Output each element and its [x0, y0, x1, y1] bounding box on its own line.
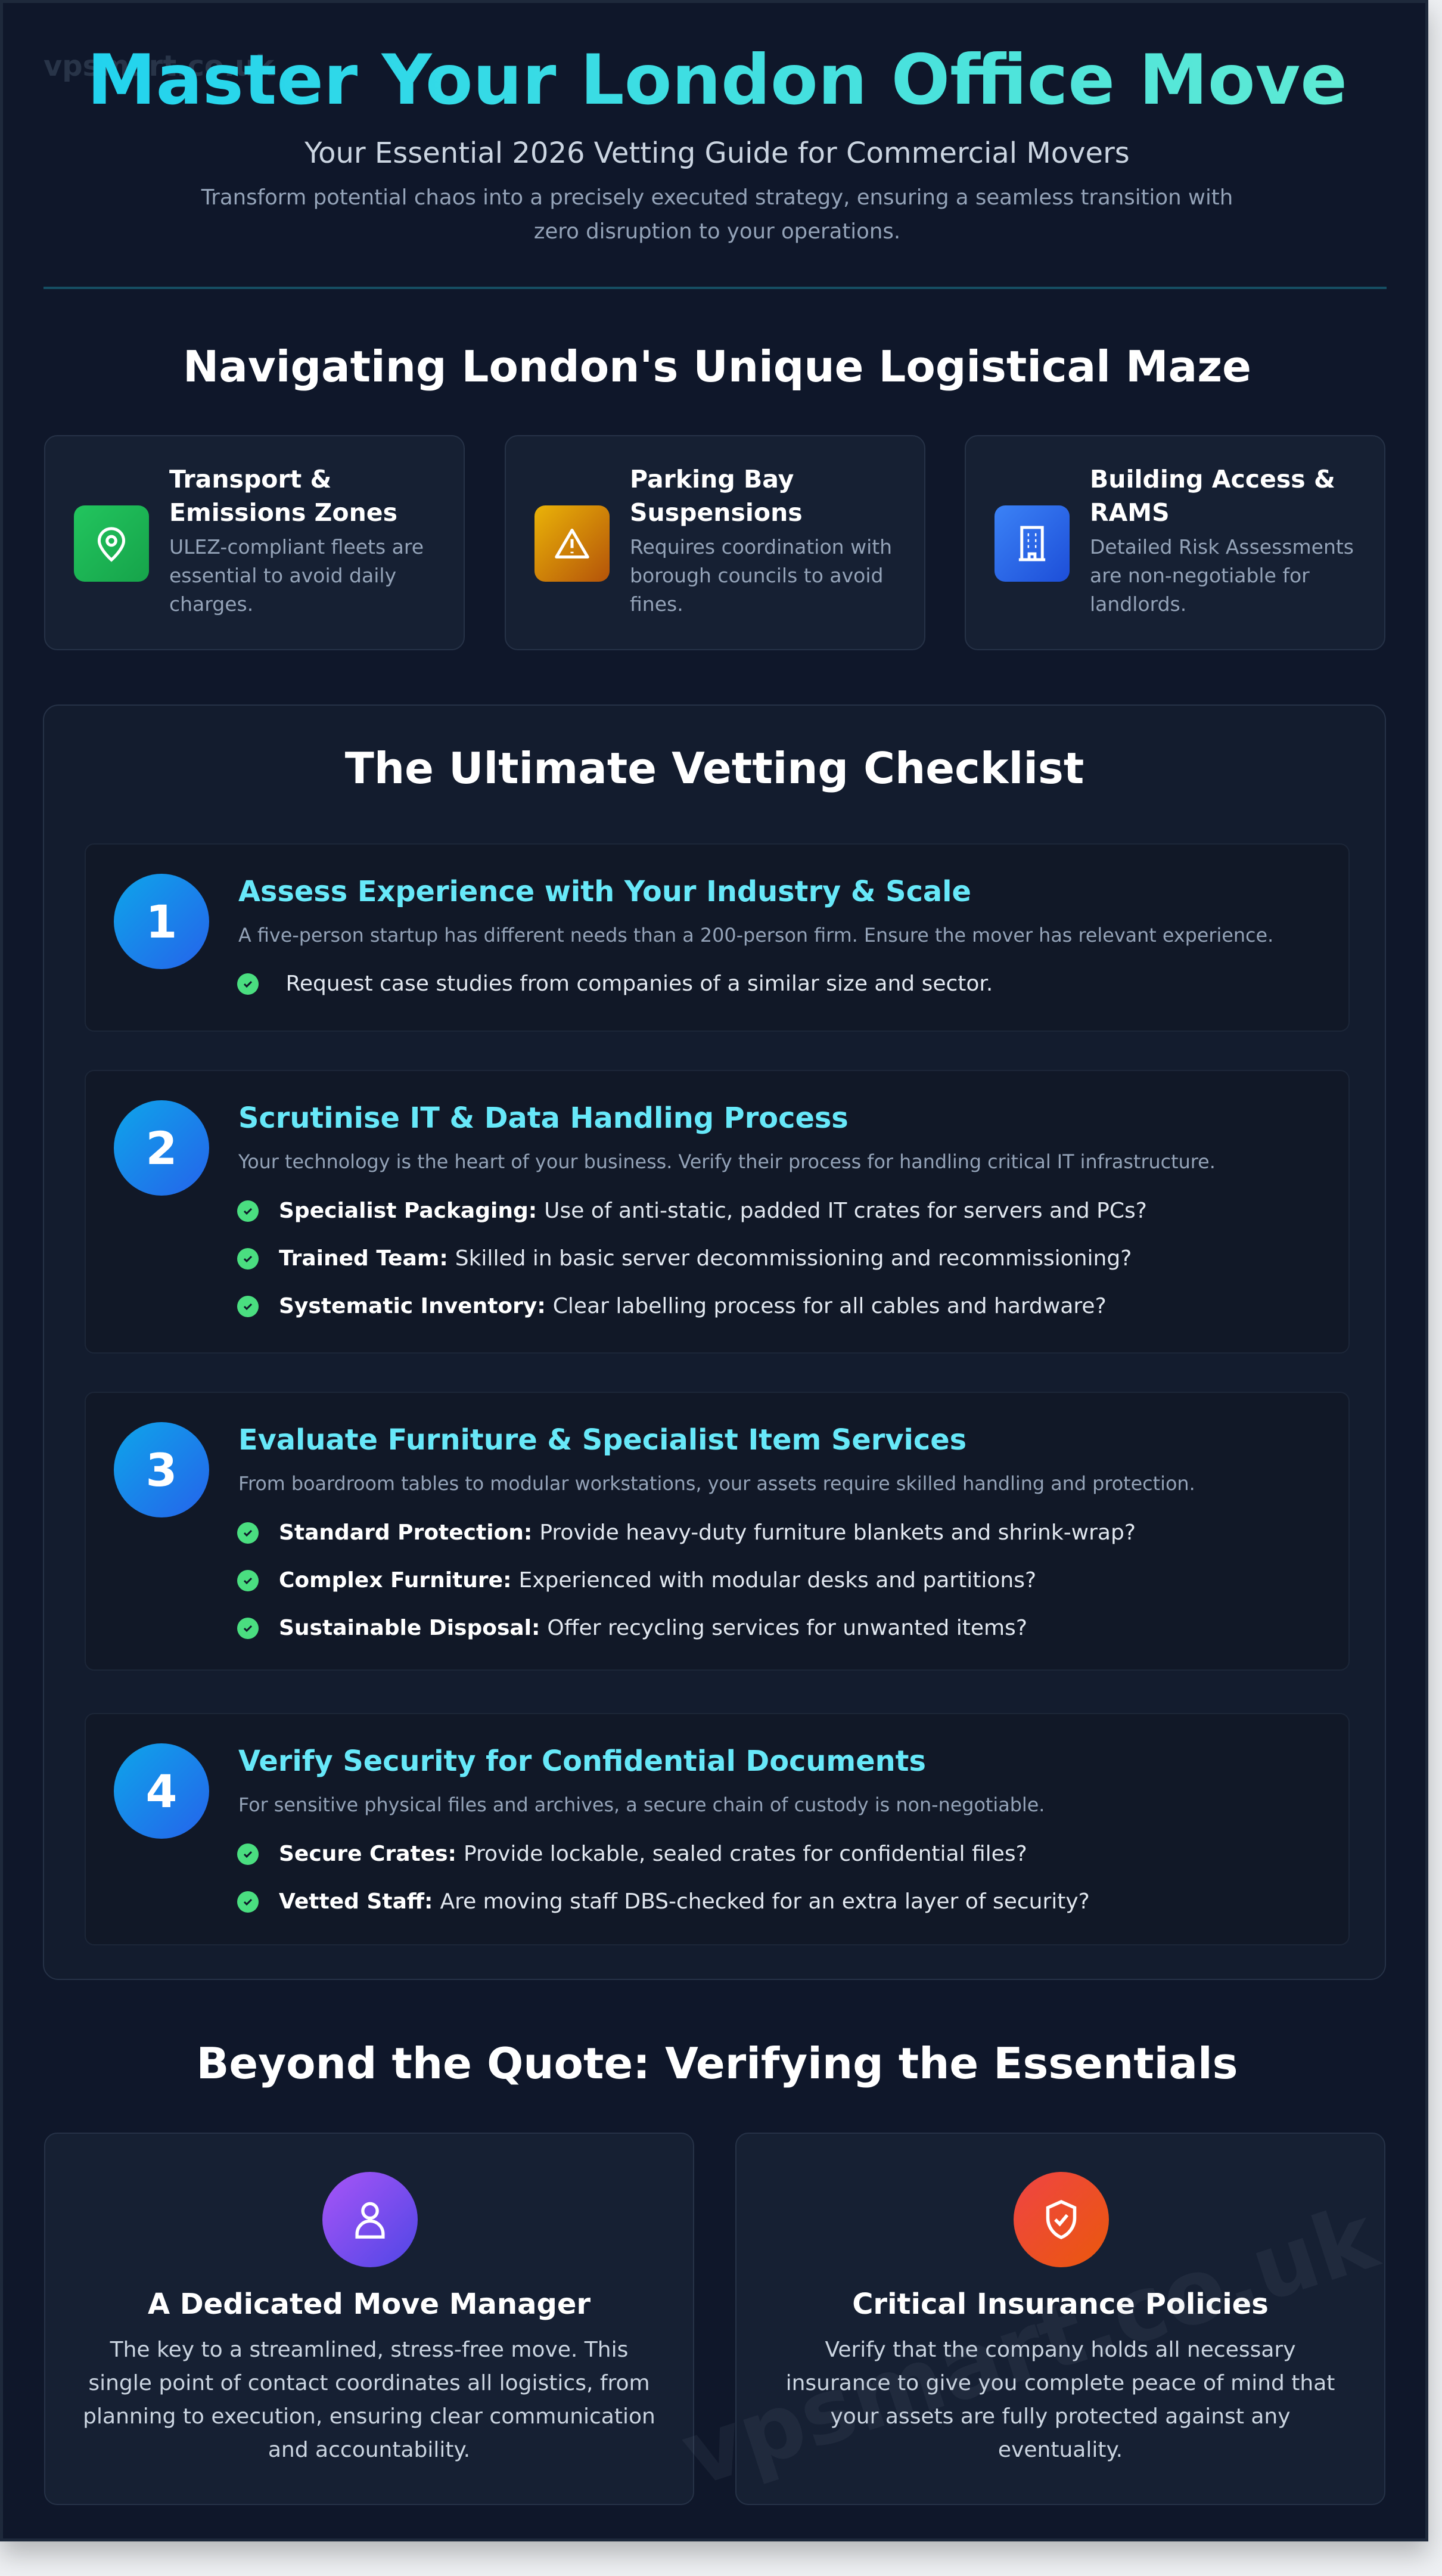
number 3 — [114, 1422, 209, 1517]
item 4 — [85, 1713, 1350, 1945]
item 3 — [85, 1392, 1350, 1671]
icon: shield — [1014, 2172, 1109, 2267]
bullet: Sustainable Disposal: — [279, 1616, 540, 1640]
item 1: A five-person startup has different needs than a 200-person firm. Ensure the mover has relevant experience. — [238, 924, 1273, 946]
item 3: From boardroom tables to modular workstations, your assets require skilled handling and protection. — [238, 1473, 1195, 1495]
card: insurance — [735, 2133, 1385, 2505]
number 4 — [114, 1743, 209, 1839]
card: building: Building Access & RAMS — [1090, 465, 1335, 527]
card: transport — [44, 435, 465, 650]
bullet: Standard Protection: — [279, 1520, 532, 1545]
heading: logistical maze: Navigating London's Unique Logistical Maze — [183, 342, 1251, 392]
bullet — [237, 1616, 1027, 1640]
item 4: Verify Security for Confidential Documents — [238, 1745, 926, 1778]
icon: person — [322, 2172, 418, 2267]
card: insurance: Critical Insurance Policies — [852, 2288, 1269, 2321]
card: insurance: Verify that the company holds all necessary insurance to give you complete peace of mind that your assets are fully protected against any eventuality. — [786, 2338, 1335, 2462]
bullet: Secure Crates: — [279, 1842, 456, 1866]
number 1 — [114, 874, 209, 969]
bullet: Experienced with modular desks and partitions? — [518, 1568, 1036, 1593]
card: move manager: The key to a streamlined, stress-free move. This single point of contact coordinates all logistics, from planning to execution, ensuring clear communication and accountability. — [83, 2338, 655, 2462]
bullet: Use of anti-static, padded IT crates for servers and PCs? — [544, 1199, 1147, 1223]
icon: warning — [534, 505, 610, 582]
bullet: Complex Furniture: — [279, 1568, 511, 1593]
bullet: Clear labelling process for all cables and hardware? — [553, 1294, 1107, 1318]
intro text: Transform potential chaos into a precisely executed strategy, ensuring a seamless transition with — [201, 185, 1233, 210]
icon: building — [995, 505, 1070, 582]
item 2: Scrutinise IT & Data Handling Process — [238, 1102, 849, 1135]
card: building — [965, 435, 1385, 650]
title: Master Your London Office Move — [87, 40, 1347, 120]
panel: vetting checklist — [43, 704, 1386, 1980]
item 2: Your technology is the heart of your business. Verify their process for handling critical IT infrastructure. — [238, 1151, 1216, 1173]
card: parking: Parking Bay Suspensions — [630, 465, 803, 527]
item 3: Evaluate Furniture & Specialist Item Services — [238, 1424, 966, 1457]
bullet: Trained Team: — [279, 1246, 448, 1271]
item 1: Assess Experience with Your Industry & Scale — [238, 876, 971, 908]
bullet: Provide lockable, sealed crates for confidential files? — [464, 1842, 1027, 1866]
bullet — [237, 1568, 1036, 1593]
bullet: Specialist Packaging: — [279, 1199, 537, 1223]
card: transport: ULEZ-compliant fleets are essential to avoid daily charges. — [169, 535, 424, 616]
card: parking: Requires coordination with borough councils to avoid fines. — [630, 535, 892, 616]
item 4: For sensitive physical files and archives, a secure chain of custody is non-negotiable. — [238, 1794, 1045, 1816]
card: move manager: A Dedicated Move Manager — [148, 2288, 591, 2321]
item 2 — [85, 1070, 1350, 1354]
bullet: Skilled in basic server decommissioning and recommissioning? — [455, 1246, 1132, 1271]
number 1: 1 — [146, 895, 177, 948]
intro text: zero disruption to your operations. — [534, 219, 900, 244]
bullet: Systematic Inventory: — [279, 1294, 546, 1318]
number 4: 4 — [146, 1764, 177, 1818]
watermark: bottom-right: vpsmart.co.uk — [670, 2186, 1388, 2507]
bullet — [237, 1199, 1147, 1223]
number 2: 2 — [146, 1122, 177, 1174]
number 2 — [114, 1100, 209, 1196]
bullet: Request case studies from companies of a similar size and sector. — [285, 972, 993, 996]
subtitle: Your Essential 2026 Vetting Guide for Commercial Movers — [304, 136, 1130, 170]
item 1 — [85, 843, 1350, 1032]
watermark: top-left: vpsmart.co.uk — [43, 49, 274, 83]
bullet: Provide heavy-duty furniture blankets and shrink-wrap? — [539, 1520, 1136, 1545]
bullet: Are moving staff DBS-checked for an extra layer of security? — [440, 1889, 1090, 1914]
icon: map pin — [74, 505, 149, 582]
bullet: Offer recycling services for unwanted items? — [547, 1616, 1027, 1640]
bullet: Vetted Staff: — [279, 1889, 433, 1914]
card: building: Detailed Risk Assessments are non-negotiable for landlords. — [1090, 535, 1354, 616]
heading: essentials: Beyond the Quote: Verifying the Essentials — [197, 2038, 1238, 2088]
card: transport: Transport & Emissions Zones — [169, 465, 397, 527]
bullet — [237, 1520, 1136, 1545]
heading: checklist: The Ultimate Vetting Checklist — [345, 743, 1084, 793]
card: parking — [505, 435, 925, 650]
bullet — [237, 1294, 1107, 1318]
card: move manager — [44, 2133, 694, 2505]
number 3: 3 — [146, 1444, 177, 1496]
intro text — [201, 185, 1233, 244]
